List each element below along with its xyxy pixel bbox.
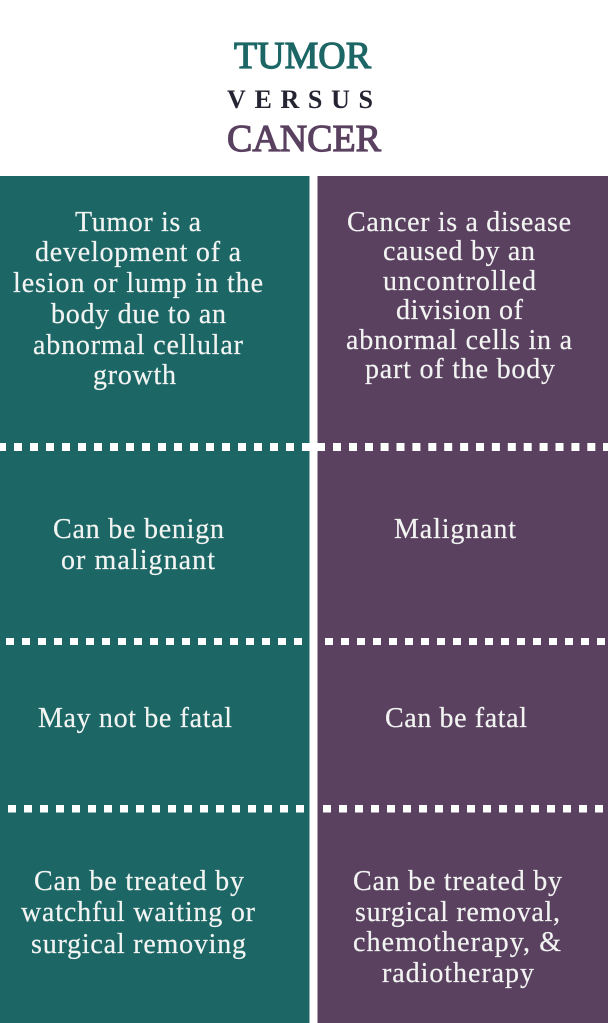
text: tumor nature: or malignant	[61, 545, 215, 576]
text: cancer treatment	[353, 866, 562, 989]
text: tumor fatality: May not be fatal	[38, 703, 232, 734]
divider row 2 squares	[6, 638, 605, 645]
text: tumor treatment	[21, 866, 256, 960]
text: cancer definition	[346, 207, 573, 385]
title: VERSUS	[227, 85, 373, 114]
title: TUMOR	[234, 35, 372, 77]
text: cancer definition: caused by an	[383, 236, 535, 267]
text: cancer definition: Cancer is a disease	[347, 207, 571, 238]
text: tumor definition: development of a	[35, 237, 242, 268]
text: tumor definition	[13, 207, 263, 391]
title: CANCER	[227, 118, 382, 160]
text: cancer definition: part of the body	[365, 354, 555, 385]
text: cancer fatality: Can be fatal	[385, 703, 527, 734]
text: tumor nature: Can be benign	[53, 514, 224, 545]
text: cancer nature: Malignant	[394, 514, 516, 545]
text: tumor definition: Tumor is a	[75, 207, 202, 238]
text: cancer definition: uncontrolled	[383, 266, 536, 297]
text: cancer treatment: chemotherapy, &	[353, 927, 561, 958]
text: cancer definition: division of	[396, 295, 524, 326]
panel: cancer column	[318, 176, 608, 1023]
text: tumor definition: abnormal cellular	[33, 330, 244, 361]
text: tumor definition: growth	[93, 360, 176, 391]
title	[227, 35, 382, 160]
text: tumor definition: body due to an	[51, 299, 226, 330]
divider row 3 squares	[0, 805, 603, 812]
text: cancer treatment: Can be treated by	[353, 866, 562, 897]
text: cancer treatment: surgical removal,	[355, 897, 560, 928]
text: tumor treatment: surgical removing	[31, 929, 246, 960]
panel: tumor column	[0, 176, 310, 1023]
text: tumor treatment: Can be treated by	[34, 866, 244, 897]
text: tumor definition: lesion or lump in the	[13, 268, 263, 299]
divider row 1 squares	[0, 443, 608, 451]
text: cancer definition: abnormal cells in a	[346, 325, 573, 356]
text: tumor treatment: watchful waiting or	[21, 897, 256, 928]
text: cancer treatment: radiotherapy	[382, 958, 534, 989]
text: tumor nature	[53, 514, 224, 576]
